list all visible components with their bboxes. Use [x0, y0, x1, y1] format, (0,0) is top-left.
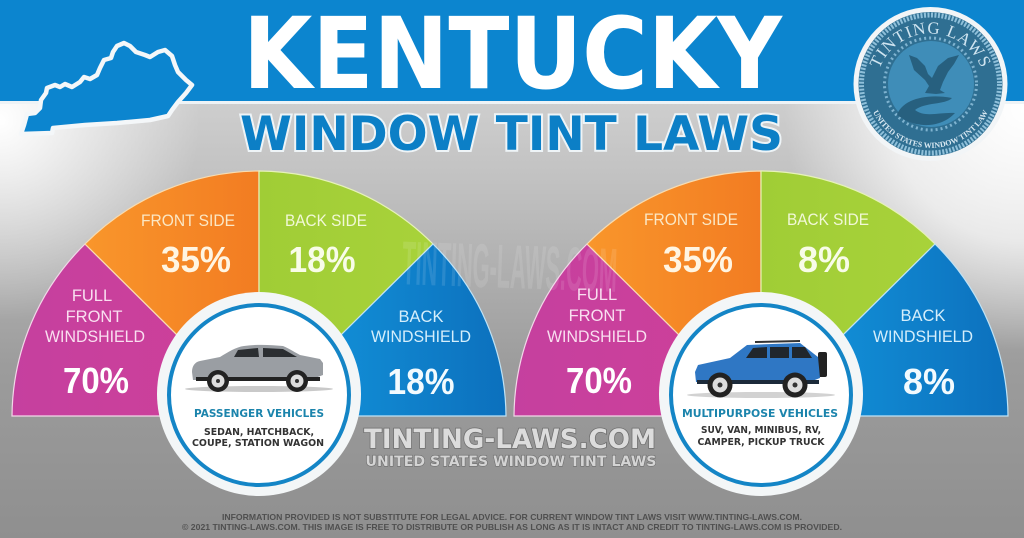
badge text: SEDAN, HATCHBACK, — [204, 427, 314, 438]
icon: sedan — [185, 345, 333, 392]
label: full front windshield: FULL — [72, 287, 112, 305]
label: back windshield: WINDSHIELD — [873, 328, 973, 346]
segment: full front windshield — [514, 244, 761, 416]
segment: front side — [587, 171, 761, 416]
footer disclaimer — [182, 512, 842, 532]
segment: front side — [85, 171, 259, 416]
segment: back side — [761, 171, 935, 416]
icon: SUV — [687, 341, 835, 398]
footer disclaimer: © 2021 TINTING-LAWS.COM. THIS IMAGE IS FREE TO DISTRIBUTE OR PUBLISH AS LONG AS IT IS INTACT AND CREDIT TO TINTING-LAWS.COM IS PROVIDED. — [182, 522, 842, 532]
value: 18%: 18% — [388, 361, 454, 402]
label: back windshield: BACK — [399, 308, 443, 326]
subtitle: WINDOW TINT LAWS — [240, 107, 783, 162]
site tagline: UNITED STATES WINDOW TINT LAWS — [366, 454, 656, 470]
icon: Kentucky state outline — [21, 43, 192, 134]
badge heading: PASSENGER VEHICLES — [194, 407, 324, 420]
gauge: multipurpose vehicles — [514, 171, 1008, 496]
value: 8%: 8% — [903, 361, 955, 402]
label: front side: FRONT SIDE — [644, 211, 738, 229]
badge: multipurpose vehicles — [659, 292, 863, 496]
segment: back windshield — [761, 244, 1008, 416]
icon: eagle — [909, 55, 959, 94]
value: 18%: 18% — [288, 239, 356, 280]
icon: wave — [897, 96, 955, 125]
badge text: CAMPER, PICKUP TRUCK — [698, 437, 825, 448]
gauge: passenger vehicles — [12, 171, 506, 496]
label: back windshield: WINDSHIELD — [371, 328, 471, 346]
value: 70%: 70% — [63, 360, 129, 401]
label: full front windshield: WINDSHIELD — [547, 328, 647, 346]
seal: Tinting Laws: UNITED STATES WINDOW TINT LAW — [874, 110, 988, 148]
seal: Tinting Laws — [854, 7, 1008, 158]
footer disclaimer: INFORMATION PROVIDED IS NOT SUBSTITUTE FOR LEGAL ADVICE. FOR CURRENT WINDOW TINT LAWS VISIT WWW.TINTING-LAWS.COM. — [222, 512, 802, 522]
value: 35%: 35% — [663, 239, 733, 280]
label: full front windshield: FRONT — [66, 308, 122, 326]
segment: back windshield — [259, 244, 506, 416]
badge heading: MULTIPURPOSE VEHICLES — [682, 407, 838, 420]
badge text: SUV, VAN, MINIBUS, RV, — [701, 425, 821, 436]
value: 70%: 70% — [566, 360, 632, 401]
badge: passenger vehicles — [157, 292, 361, 496]
label: back side: BACK SIDE — [285, 212, 367, 230]
label: back side: BACK SIDE — [787, 211, 869, 229]
label: back windshield: BACK — [901, 307, 945, 325]
infographic canvas: TINTING-LAWS.COM — [401, 229, 618, 306]
label: full front windshield: FRONT — [569, 307, 625, 325]
seal lettering: TINTING LAWS — [869, 22, 990, 66]
site name: TINTING-LAWS.COM — [364, 424, 656, 455]
label: full front windshield: FULL — [577, 286, 617, 304]
header band — [0, 0, 1024, 104]
segment: full front windshield — [12, 244, 259, 416]
segment: back side — [259, 171, 433, 416]
label: full front windshield: WINDSHIELD — [45, 328, 145, 346]
value: 35%: 35% — [161, 239, 231, 280]
title: KENTUCKY — [243, 0, 783, 112]
label: front side: FRONT SIDE — [141, 212, 235, 230]
value: 8%: 8% — [798, 239, 850, 280]
badge text: COUPE, STATION WAGON — [192, 438, 324, 449]
